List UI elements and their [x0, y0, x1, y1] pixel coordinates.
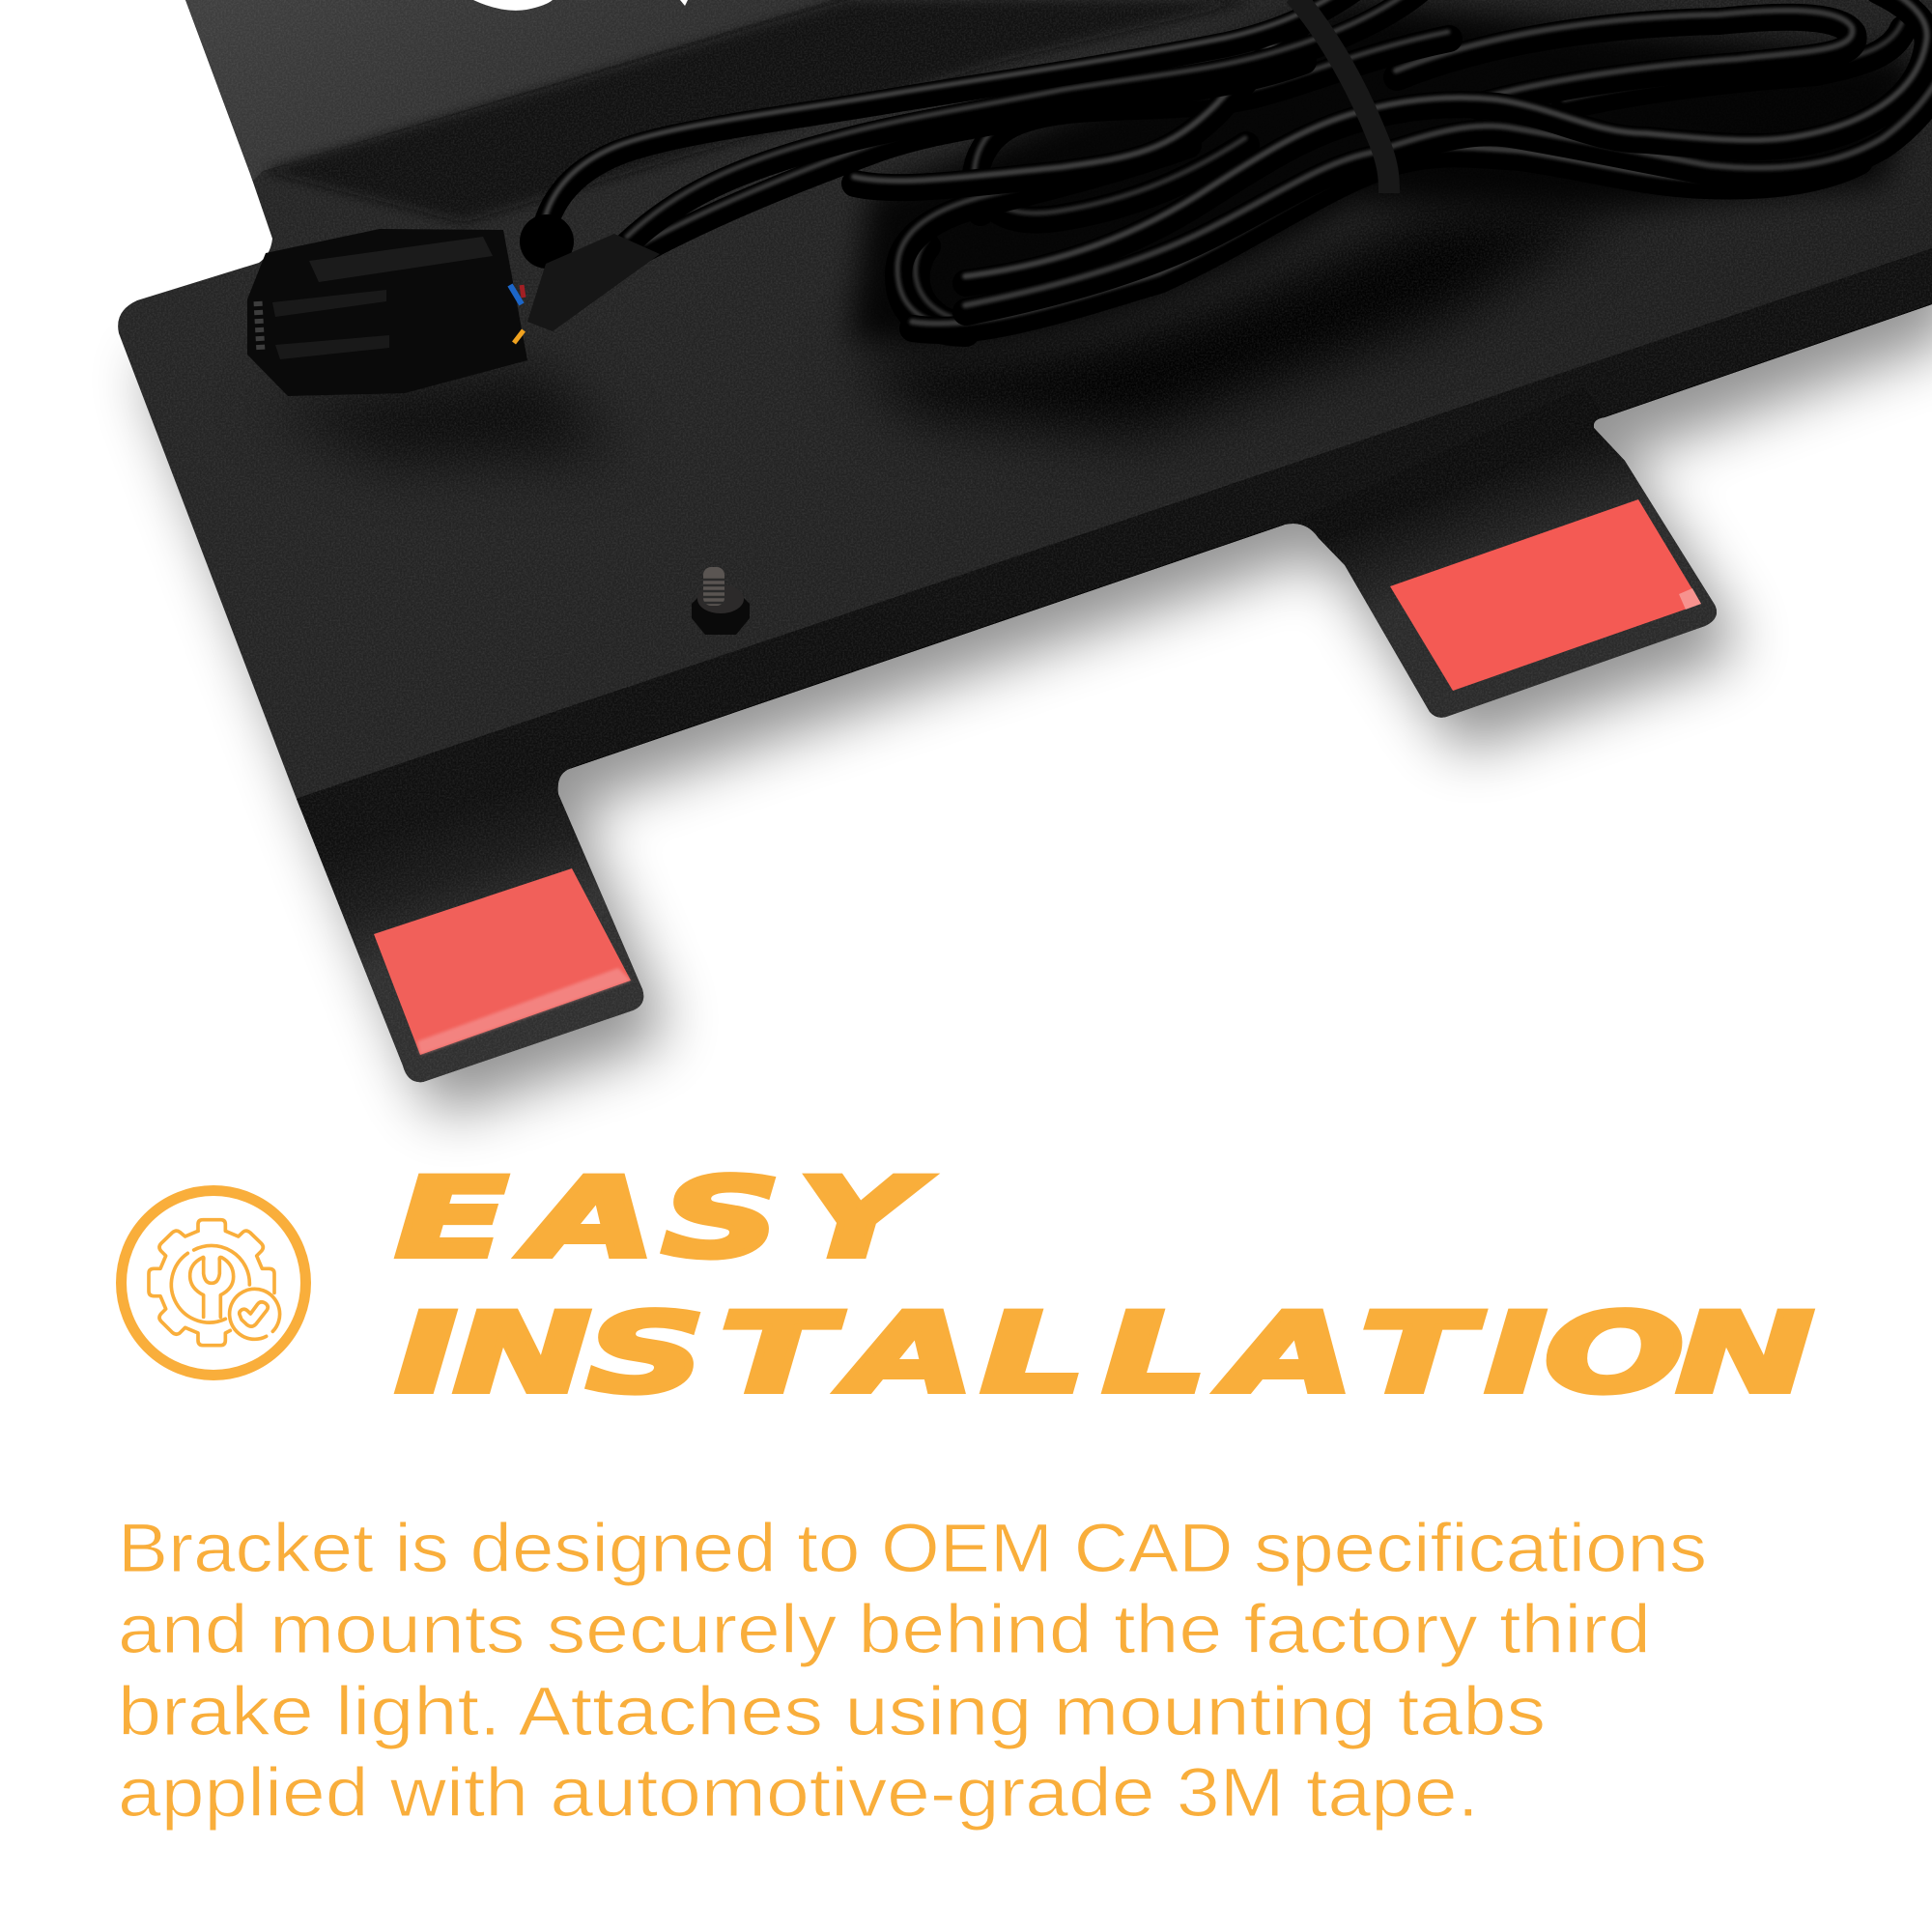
electrical connector	[247, 214, 660, 396]
red tape: right tab	[1390, 499, 1701, 691]
logo cutout	[473, 0, 688, 11]
connector hole	[520, 214, 574, 269]
glossy bottom edge	[572, 307, 1932, 771]
coloured wires	[510, 285, 522, 304]
lower folded strip	[296, 248, 1932, 808]
cable bundle shadow	[850, 0, 1922, 344]
mounting bolt	[692, 567, 750, 635]
black metal plate	[118, 0, 1932, 1082]
heading line 1: EASY	[396, 1154, 931, 1282]
right tab	[1296, 417, 1718, 718]
body line 4: applied with automotive-grade 3M tape.	[118, 1755, 1479, 1832]
upper flange	[174, 0, 848, 184]
heading line 2: INSTALLATION	[396, 1290, 1813, 1417]
body line 2: and mounts securely behind the factory third	[118, 1592, 1651, 1668]
left tab	[290, 687, 645, 1086]
body line 1: Bracket is designed to OEM CAD specifications	[118, 1511, 1707, 1587]
cables	[542, 0, 1932, 333]
body text	[118, 1511, 1707, 1832]
icon: gear with wrench and check	[122, 1190, 305, 1376]
heat-shrink tape	[527, 234, 660, 331]
red tape: left tab	[374, 868, 631, 1055]
metal surface grain	[118, 0, 1932, 1082]
cable tie	[1294, 0, 1389, 193]
drop shadow under bracket	[142, 226, 1932, 1115]
icon ring	[122, 1190, 305, 1376]
bracket photo	[0, 0, 1932, 1159]
body line 3: brake light. Attaches using mounting tabs	[118, 1674, 1546, 1750]
heading	[396, 1154, 1813, 1417]
connector spring bolt	[258, 301, 261, 353]
gear, wrench, check badge	[149, 1220, 280, 1346]
plate shading	[261, 193, 1642, 464]
